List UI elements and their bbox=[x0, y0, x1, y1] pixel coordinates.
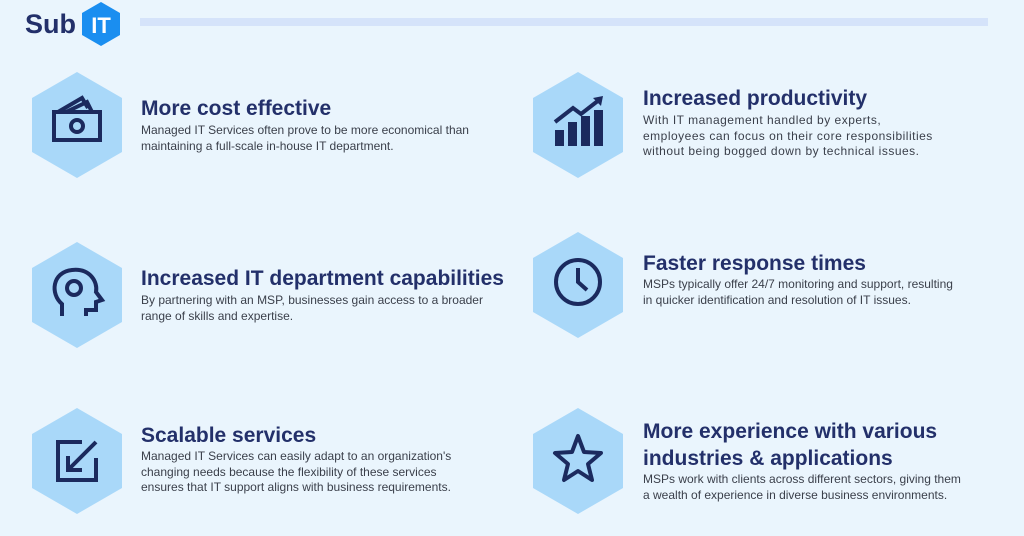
description: ensures that IT support aligns with business requirements. bbox=[141, 480, 451, 494]
description bbox=[643, 113, 933, 158]
icon: chart bbox=[533, 72, 623, 178]
description: maintaining a full-scale in-house IT department. bbox=[141, 138, 394, 152]
icon: money bbox=[32, 72, 122, 178]
panel: capabilities bbox=[32, 242, 504, 348]
panel: experience bbox=[533, 408, 961, 514]
title: More cost effective bbox=[141, 97, 331, 120]
description: Managed IT Services can easily adapt to an organization's bbox=[141, 449, 451, 463]
title: Faster response times bbox=[643, 252, 866, 275]
title: Scalable services bbox=[141, 424, 316, 447]
title: industries & applications bbox=[643, 447, 893, 470]
logo: IT bbox=[91, 13, 111, 38]
logo: Sub bbox=[25, 9, 76, 39]
description: a wealth of experience in diverse business environments. bbox=[643, 488, 947, 502]
description: MSPs work with clients across different sectors, giving them bbox=[643, 472, 961, 486]
description bbox=[141, 449, 451, 494]
description bbox=[141, 293, 483, 322]
description bbox=[643, 472, 961, 502]
description: With IT management handled by experts, bbox=[643, 113, 881, 127]
description: employees can focus on their core responsibilities bbox=[643, 128, 933, 142]
description: By partnering with an MSP, businesses gain access to a broader bbox=[141, 293, 483, 307]
description bbox=[141, 123, 469, 152]
icon: star bbox=[533, 408, 623, 514]
title bbox=[643, 420, 937, 470]
header bar bbox=[140, 18, 988, 26]
logo bbox=[25, 2, 120, 46]
title: Increased IT department capabilities bbox=[141, 267, 504, 290]
description bbox=[643, 277, 953, 306]
panel: productivity bbox=[533, 72, 933, 178]
icon: arrow box bbox=[32, 408, 122, 514]
description: Managed IT Services often prove to be more economical than bbox=[141, 123, 469, 137]
description: changing needs because the flexibility of these services bbox=[141, 464, 437, 478]
description: range of skills and expertise. bbox=[141, 308, 293, 322]
icon: head bbox=[32, 242, 122, 348]
panel: scalable bbox=[32, 408, 451, 514]
title: More experience with various bbox=[643, 420, 937, 443]
description: in quicker identification and resolution of IT issues. bbox=[643, 292, 911, 306]
title: Increased productivity bbox=[643, 87, 867, 110]
panel: cost effective bbox=[32, 72, 469, 178]
icon: clock bbox=[533, 232, 623, 338]
description: without being bogged down by technical issues. bbox=[643, 144, 920, 158]
description: MSPs typically offer 24/7 monitoring and support, resulting bbox=[643, 277, 953, 291]
panel: response times bbox=[533, 232, 953, 338]
